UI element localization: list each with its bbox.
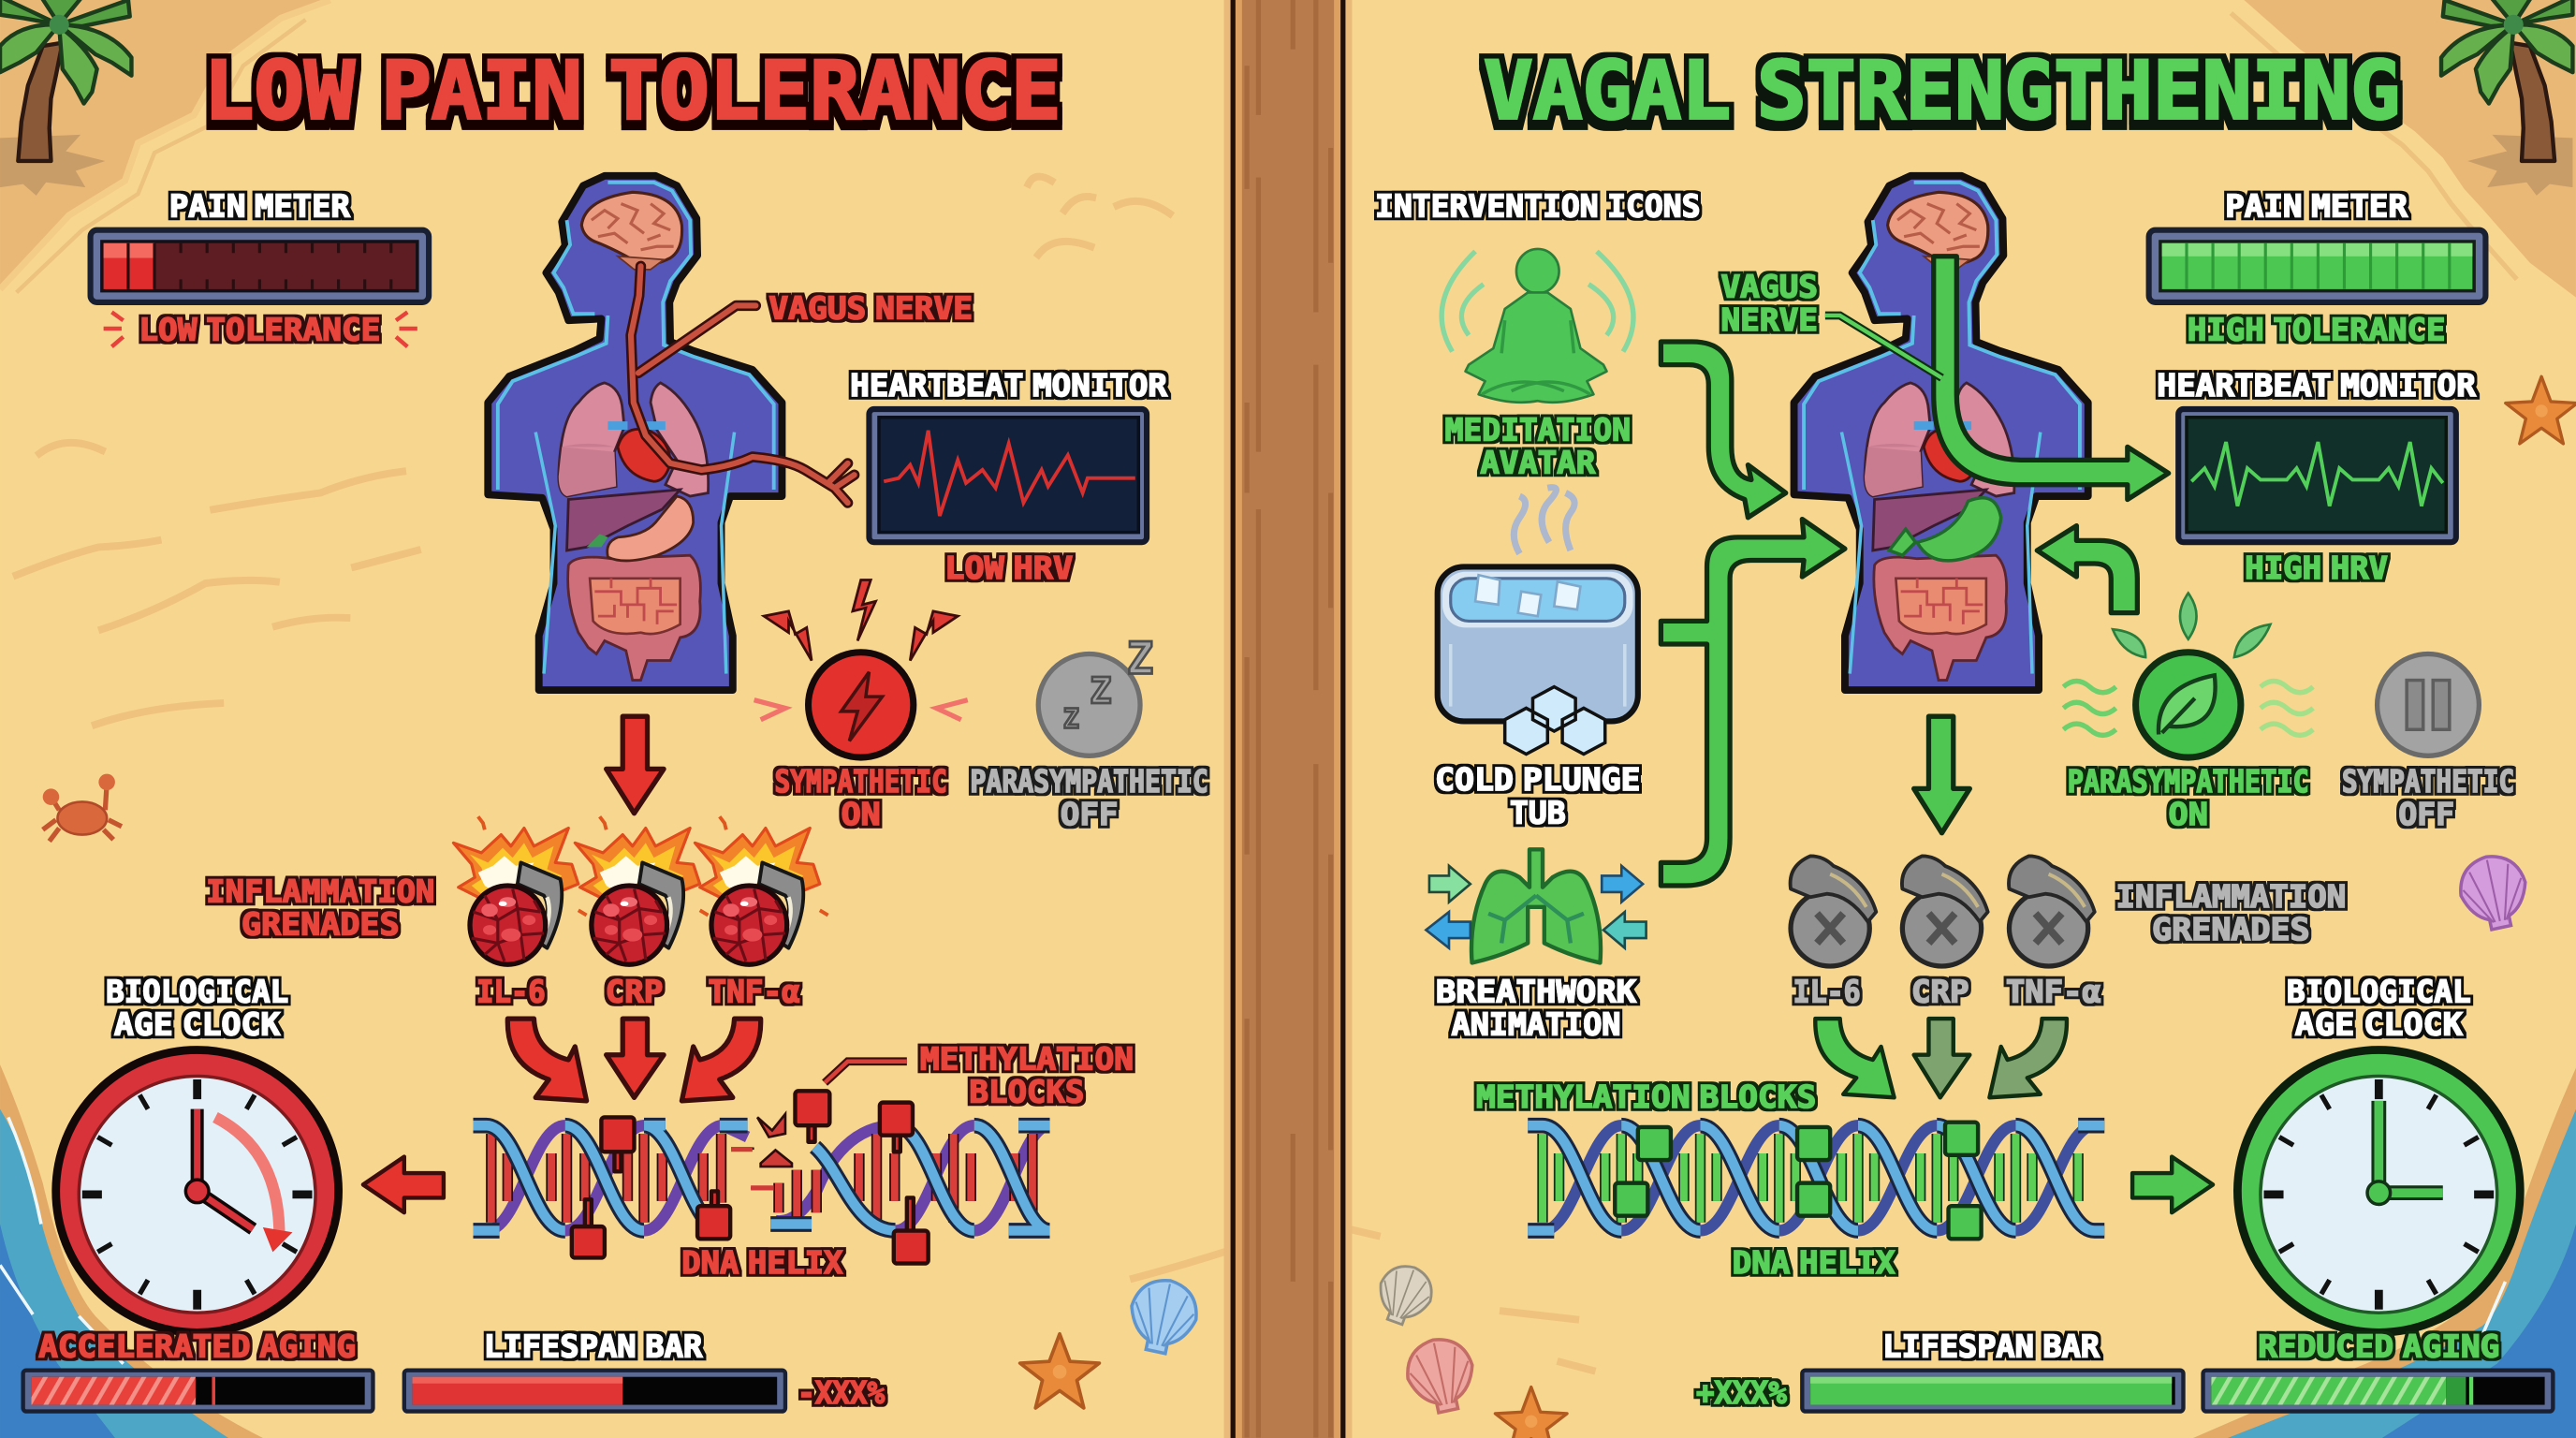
meditation avatar label	[1445, 411, 1631, 480]
reduced aging label: REDUCED AGING	[2258, 1328, 2499, 1365]
cytokine labels: TNF-α	[708, 974, 800, 1010]
biological age clock label: BIOLOGICAL	[2287, 974, 2471, 1010]
icon: sympathetic on	[754, 580, 968, 757]
pain meter label: PAIN METER	[169, 188, 351, 225]
icon: parasympathetic off	[1038, 634, 1153, 756]
sympathetic off label: OFF	[2398, 796, 2454, 832]
aging progress bar	[2203, 1371, 2553, 1412]
icon: steam	[1514, 488, 1574, 553]
inflammation grenades label: INFLAMMATION	[2116, 878, 2346, 915]
aging progress bar	[23, 1371, 373, 1412]
icon: breathwork lungs	[1426, 849, 1647, 962]
biological age clock label: BIOLOGICAL	[106, 974, 288, 1010]
heartbeat monitor label: HEARTBEAT MONITOR	[2157, 367, 2477, 404]
stomach, healthy	[1889, 498, 2001, 561]
inflammation grenades label	[2116, 878, 2346, 947]
arrow: body to grenades	[607, 716, 664, 814]
parasympathetic off label: OFF	[1061, 796, 1118, 832]
methylation blocks, attached	[1615, 1123, 1982, 1239]
dna helix label: DNA HELIX	[681, 1244, 842, 1281]
arrow: cold plunge and breathwork to body	[1661, 520, 1845, 886]
panel: low pain tolerance	[23, 44, 1208, 1412]
parasympathetic on label	[2068, 763, 2309, 832]
cytokine labels: IL-6	[476, 974, 546, 1010]
title: low pain tolerance: LOW PAIN TOLERANCE	[204, 44, 1061, 138]
heartbeat monitor, steady	[2178, 409, 2456, 542]
icon: sympathetic off	[2378, 654, 2479, 756]
icon: parasympathetic off: Z	[1090, 670, 1112, 712]
icon: biological age clock, accelerated	[56, 1049, 339, 1332]
icon: cold plunge tub	[1438, 566, 1638, 755]
lifespan change value: -XXX%	[798, 1374, 885, 1411]
sympathetic on label	[775, 763, 947, 832]
icon: right palm tree	[2441, 0, 2572, 196]
lifespan bar label: LIFESPAN BAR	[484, 1328, 703, 1365]
biological age clock label: AGE CLOCK	[2295, 1006, 2463, 1043]
inflammation grenades label: GRENADES	[242, 906, 400, 943]
cytokine labels	[476, 974, 800, 1010]
heartbeat monitor, erratic	[869, 409, 1147, 542]
lifespan change value: +XXX%	[1696, 1374, 1787, 1411]
meditation avatar label: AVATAR	[1480, 444, 1596, 480]
vagus nerve label with leader: NERVE	[1720, 301, 1818, 338]
vagus nerve, weak	[631, 266, 855, 503]
vagus nerve label with leader	[1720, 269, 1942, 378]
methylation blocks label with leader: BLOCKS	[970, 1074, 1084, 1110]
cytokine labels: CRP	[1911, 974, 1969, 1010]
heartbeat monitor label: HEARTBEAT MONITOR	[850, 367, 1168, 404]
arrow: parasympathetic to body	[2037, 526, 2137, 613]
inflammation grenades label: GRENADES	[2152, 911, 2310, 947]
cytokine labels: IL-6	[1793, 974, 1861, 1010]
cold plunge tub label: COLD PLUNGE	[1435, 761, 1640, 798]
methylation blocks label: METHYLATION BLOCKS	[1476, 1078, 1816, 1115]
inflammation grenades label	[206, 873, 434, 943]
center wooden divider	[1224, 0, 1352, 1438]
biological age clock label: AGE CLOCK	[114, 1006, 280, 1043]
icon: parasympathetic on	[2063, 594, 2313, 757]
breathwork animation label: BREATHWORK	[1436, 974, 1636, 1010]
high tolerance label: HIGH TOLERANCE	[2188, 311, 2445, 347]
cold plunge tub label	[1435, 761, 1640, 830]
methylation blocks label with leader: METHYLATION	[920, 1041, 1134, 1078]
icon: crab	[43, 774, 122, 842]
lifespan bar, extended	[1802, 1371, 2183, 1412]
icon: parasympathetic off: Z	[1127, 634, 1153, 685]
arrow: dna to clock	[2132, 1157, 2213, 1212]
icon: exploding grenades	[453, 816, 828, 964]
low tolerance label with sparks: LOW TOLERANCE	[139, 311, 380, 347]
biological age clock label	[106, 974, 288, 1043]
arrows: grenades to dna	[507, 1019, 761, 1101]
pain meter bar, low	[91, 230, 429, 302]
lifespan bar, shortened	[404, 1371, 785, 1412]
cytokine labels: CRP	[606, 974, 663, 1010]
sympathetic off label	[2342, 763, 2514, 832]
arrow: meditation to body	[1661, 342, 1786, 518]
title: vagal strengthening: VAGAL STRENGTHENING	[1484, 44, 2400, 138]
lifespan bar label: LIFESPAN BAR	[1882, 1328, 2100, 1365]
arrows: grenades to dna	[1815, 1019, 2067, 1097]
icon: defused grenades	[1791, 856, 2095, 966]
dna helix, intact	[1528, 1125, 2104, 1231]
cytokine labels	[1793, 974, 2101, 1010]
breathwork animation label: ANIMATION	[1452, 1006, 1620, 1043]
icon: meditation avatar	[1442, 249, 1633, 403]
arrow: strong vagus nerve to monitor	[1934, 257, 2169, 500]
icon: parasympathetic off: Z	[1063, 703, 1079, 734]
stomach and gallbladder	[587, 496, 694, 561]
biological age clock label	[2287, 974, 2471, 1043]
icon: left palm tree	[0, 0, 131, 196]
pain meter bar, full	[2149, 230, 2485, 302]
methylation blocks label with leader	[825, 1041, 1134, 1110]
arrow: body to grenades	[1914, 716, 1969, 833]
sympathetic on label: ON	[842, 796, 881, 832]
icon: biological age clock, slowed	[2237, 1049, 2520, 1332]
cytokine labels: TNF-α	[2006, 974, 2101, 1010]
parasympathetic off label	[970, 763, 1208, 832]
panel: vagal strengthening	[1375, 44, 2553, 1412]
methylation blocks, detached	[572, 1091, 929, 1264]
dna helix label: DNA HELIX	[1733, 1244, 1895, 1281]
body with organs	[1794, 176, 2088, 690]
dna helix, damaged	[474, 1114, 1050, 1231]
accelerated aging label: ACCELERATED AGING	[38, 1328, 356, 1365]
parasympathetic off label: PARASYMPATHETIC	[970, 763, 1208, 800]
body with organs	[488, 176, 782, 690]
inflammation grenades label: INFLAMMATION	[206, 873, 434, 910]
intervention icons heading: INTERVENTION ICONS	[1375, 188, 1701, 225]
icon: decorative seashells and starfish	[1020, 376, 2576, 1438]
sympathetic off label: SYMPATHETIC	[2342, 763, 2514, 800]
sympathetic on label: SYMPATHETIC	[775, 763, 947, 800]
pain meter label: PAIN METER	[2225, 188, 2408, 225]
vagus nerve label: VAGUS NERVE	[768, 289, 973, 326]
parasympathetic on label: PARASYMPATHETIC	[2068, 763, 2309, 800]
parasympathetic on label: ON	[2169, 796, 2208, 832]
cold plunge tub label: TUB	[1510, 794, 1566, 830]
meditation avatar label: MEDITATION	[1445, 411, 1631, 448]
high hrv label: HIGH HRV	[2245, 550, 2388, 586]
breathwork animation label	[1436, 974, 1636, 1043]
arrow: dna to clock	[363, 1157, 444, 1212]
vagus nerve label with leader: VAGUS	[1720, 269, 1818, 305]
low hrv label: LOW HRV	[944, 550, 1073, 586]
